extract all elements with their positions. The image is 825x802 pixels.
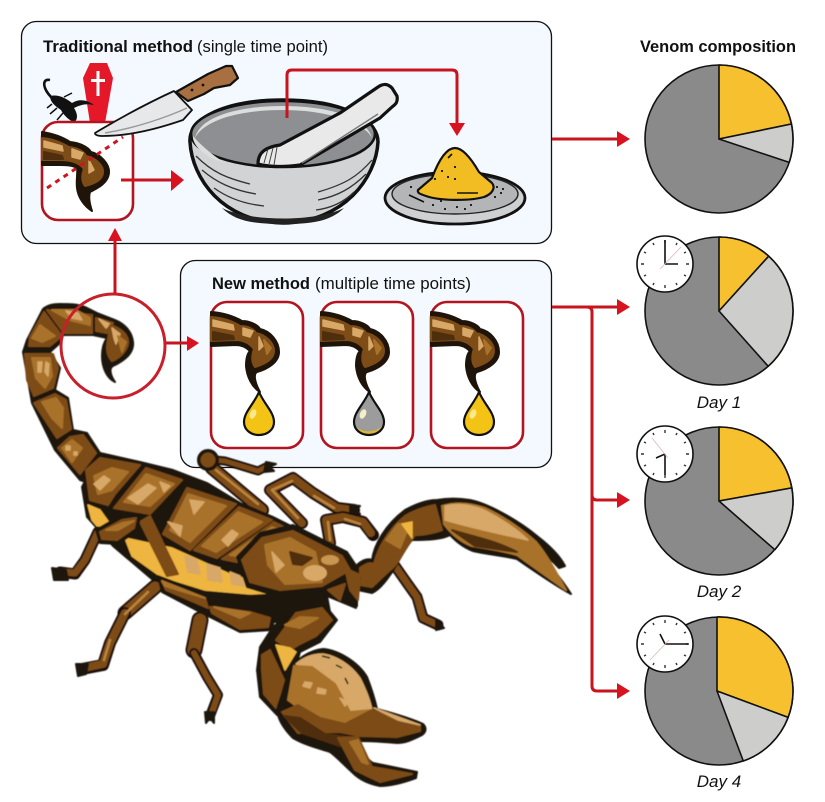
icon: clock day 1 bbox=[637, 236, 693, 292]
arrow: traditional to pie bbox=[552, 131, 630, 147]
label: day 2: Day 2 bbox=[697, 582, 742, 601]
magnifier circle bbox=[61, 294, 165, 398]
arrow: circle to traditional panel bbox=[108, 228, 122, 295]
pie: day 2 bbox=[645, 427, 793, 575]
panel: traditional method bbox=[22, 22, 552, 244]
pie: day 1 bbox=[645, 237, 793, 385]
belly plates bbox=[88, 505, 292, 594]
arrow: bowl to powder bbox=[287, 70, 465, 136]
label: day 4: Day 4 bbox=[697, 772, 741, 791]
icon: mortar bowl bbox=[190, 100, 378, 224]
heading: venom composition: Venom composition bbox=[640, 38, 796, 56]
icon: yellow venom drop bbox=[464, 392, 494, 435]
sample box 1 bbox=[211, 302, 303, 448]
pie: day 4 bbox=[645, 617, 793, 765]
pie: traditional bbox=[645, 65, 793, 213]
middle legs bbox=[76, 576, 275, 723]
heading: traditional method: Traditional method bbox=[43, 38, 193, 56]
heading: traditional method: (single time point) bbox=[197, 38, 328, 56]
icon: coffin bbox=[83, 63, 113, 123]
right pincer bbox=[356, 498, 571, 594]
sample box 3 bbox=[431, 302, 523, 448]
sample box 2 bbox=[321, 302, 413, 448]
legs behind body bbox=[198, 450, 444, 630]
icon: grey venom drop bbox=[354, 392, 384, 435]
icon: pestle bbox=[258, 84, 397, 166]
abdomen plates bbox=[86, 458, 290, 562]
icon: knife bbox=[95, 66, 238, 136]
head shield bbox=[237, 525, 360, 606]
illustration: scorpion bbox=[23, 304, 571, 786]
left rear leg bbox=[52, 514, 140, 580]
label: day 1: Day 1 bbox=[697, 393, 741, 412]
icon: clock day 4 bbox=[637, 616, 693, 672]
heading: new method: (multiple time points) bbox=[315, 275, 471, 293]
arrow: circle to new method panel bbox=[166, 336, 199, 351]
icon: small scorpion bbox=[44, 80, 94, 122]
icon: clock day 2 bbox=[637, 426, 693, 482]
icon: yellow venom drop bbox=[244, 392, 274, 435]
telson cut bbox=[42, 132, 109, 211]
panel: new method bbox=[180, 260, 552, 468]
tail bbox=[23, 304, 133, 490]
sample box: dissected telson bbox=[42, 122, 133, 220]
big pincer claw bbox=[277, 649, 426, 786]
heading: new method: New method bbox=[212, 275, 310, 293]
arrow: telson to bowl bbox=[121, 170, 184, 191]
side plate bbox=[140, 516, 178, 576]
icon: plate with powder bbox=[385, 148, 525, 224]
arrow: new method branches to pies bbox=[552, 299, 630, 699]
body silhouette bbox=[82, 453, 360, 622]
dashed cut line bbox=[47, 137, 123, 188]
big pincer arm bbox=[257, 603, 337, 715]
